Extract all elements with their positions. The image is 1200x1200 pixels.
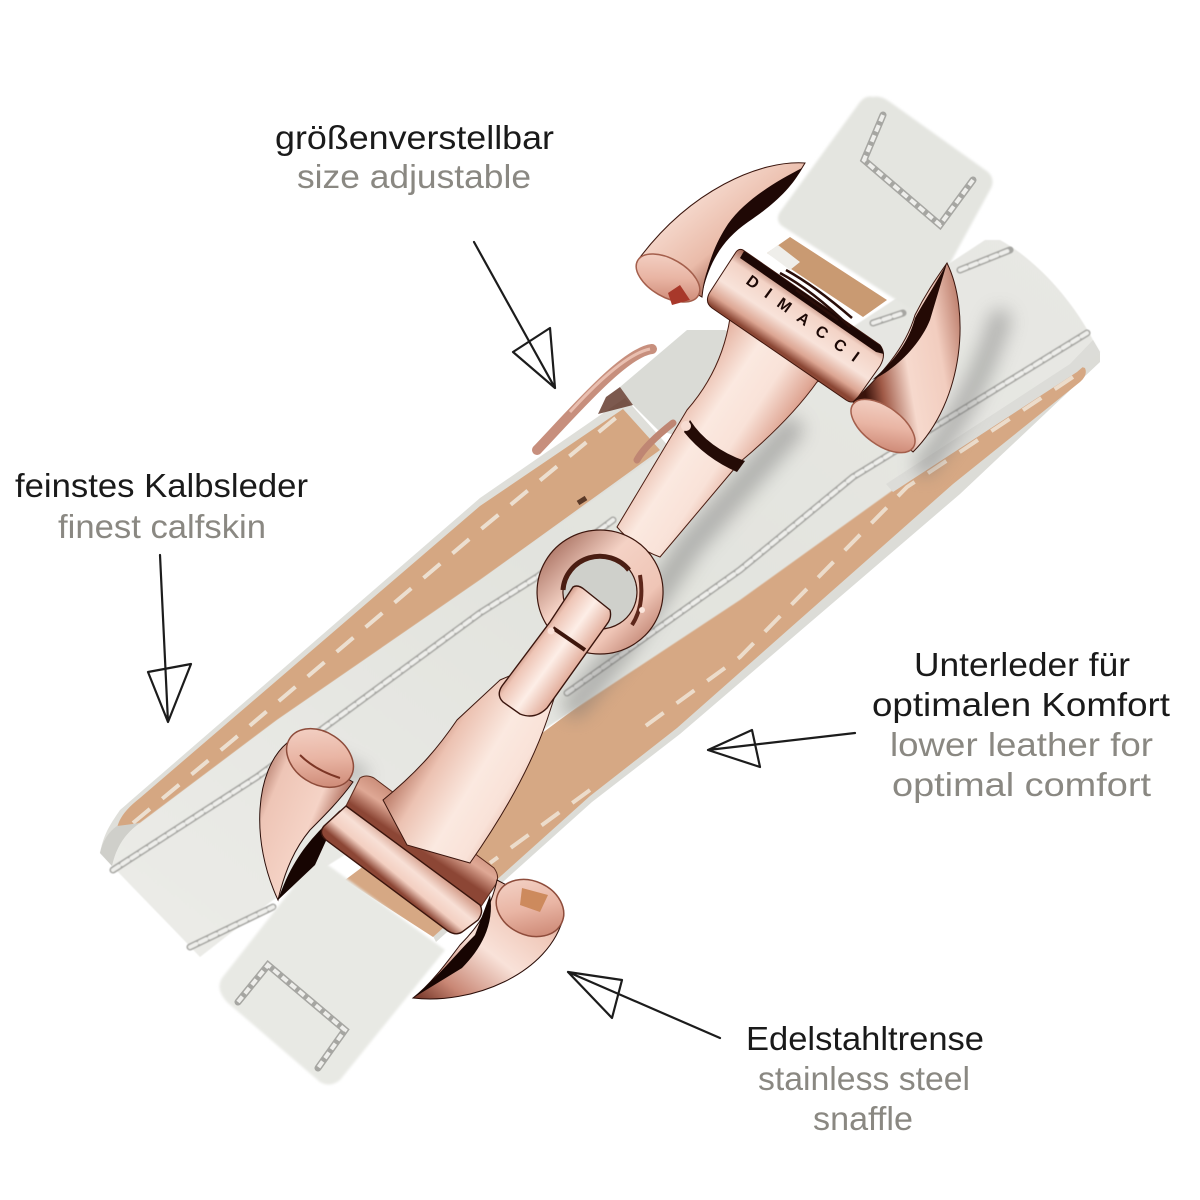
top tab: [778, 97, 993, 308]
bottom tab: [220, 857, 445, 1085]
brand text: DIMACCI: [743, 272, 862, 366]
label: lower leather: optimal comfort: [892, 766, 1151, 803]
label: stainless steel snaffle: [746, 1020, 984, 1137]
lower right horn: [413, 869, 573, 999]
lower link: [499, 586, 611, 716]
label: stainless steel snaffle: Edelstahltrense: [746, 1020, 984, 1057]
label: finest calfskin: finest calfskin: [58, 508, 266, 545]
top shank: [617, 300, 830, 557]
label: lower leather: lower leather for: [890, 726, 1153, 763]
logo swoosh: [780, 270, 852, 327]
snaffle buckle: [260, 163, 960, 999]
back ring behind strap: [537, 349, 652, 450]
buckle shadow on strap: [325, 320, 1000, 775]
lower bar: [321, 806, 482, 934]
lower shank and back bar: [346, 650, 570, 908]
arrow: to calfskin strap: [148, 555, 191, 722]
tan strip under top tab: [767, 237, 887, 317]
label: lower leather: optimalen Komfort: [872, 686, 1170, 723]
label: size adjustable: size adjustable: [297, 158, 531, 195]
arrow: to buckle strap: [474, 242, 555, 388]
arrow: to lining: [708, 730, 855, 767]
main white leather strap: [100, 240, 1100, 957]
arrow: to snaffle: [568, 972, 720, 1038]
ring: [537, 530, 663, 654]
label: finest calfskin: [15, 467, 308, 545]
label: size adjustable: [275, 119, 554, 195]
label: lower leather: Unterleder für: [914, 646, 1130, 683]
top right horn: [842, 263, 960, 463]
label: stainless steel snaffle: stainless steel: [758, 1060, 970, 1097]
label: lower leather: [872, 646, 1170, 803]
back strap with tan lining: [100, 398, 690, 900]
lower left horn: [260, 717, 364, 900]
top bar with logo: [707, 249, 884, 402]
tab loop behind buckle: [578, 330, 760, 503]
label: size adjustable: größenverstellbar: [275, 119, 554, 156]
strap rope stitching: [113, 250, 1087, 947]
tan lining of lower band: [345, 352, 1100, 942]
label: stainless steel snaffle: snaffle: [813, 1100, 913, 1137]
label: finest calfskin: feinstes Kalbsleder: [15, 467, 308, 504]
tan stitching: [133, 412, 623, 823]
top left horn: [628, 163, 805, 312]
